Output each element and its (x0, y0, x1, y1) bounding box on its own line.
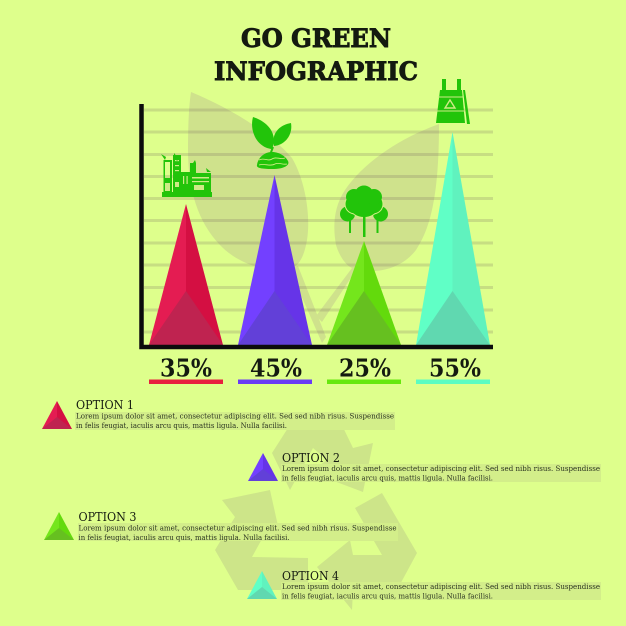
option 2: OPTION 2 (282, 450, 340, 465)
option 1: in felis feugiat, iaculis arcu quis, mattis ligula. Nulla facilisi. (76, 421, 287, 430)
background: leaves (188, 92, 439, 343)
option 4: OPTION 4 (282, 568, 339, 583)
title: GO GREEN (241, 24, 391, 53)
label: 25%: 25% (339, 354, 391, 382)
label: 55%: 55% (429, 354, 481, 382)
title: INFOGRAPHIC (214, 57, 418, 86)
option 4 (247, 568, 601, 600)
option 4: in felis feugiat, iaculis arcu quis, mattis ligula. Nulla facilisi. (282, 592, 493, 600)
percentage labels (149, 354, 490, 384)
option 1 (42, 397, 395, 430)
option 4: Lorem ipsum dolor sit amet, consectetur adipiscing elit. Sed sed nibh risus. Suspendisse (282, 582, 600, 591)
background: recycle symbol (215, 417, 417, 610)
title (214, 24, 418, 86)
icon: red triangle (42, 401, 72, 429)
grid lines (144, 108, 493, 334)
triangle chart (149, 132, 490, 345)
icon: factory (161, 153, 212, 197)
label: 35%: 35% (160, 354, 212, 382)
icon: trees (340, 186, 388, 237)
option 1: Lorem ipsum dolor sit amet, consectetur adipiscing elit. Sed sed nibh risus. Suspendisse (76, 412, 394, 420)
icon: teal triangle (247, 571, 277, 599)
option 3: OPTION 3 (78, 509, 137, 524)
option 2 (248, 450, 601, 482)
bar: purple 45% (238, 175, 312, 345)
option 3: in felis feugiat, iaculis arcu quis, mattis ligula. Nulla facilisi. (78, 533, 290, 542)
icon: sprout (252, 117, 291, 169)
icon: shopping bag (436, 79, 470, 124)
bar: teal 55% (416, 132, 490, 345)
bar: red 35% (149, 204, 223, 345)
icon: purple triangle (248, 453, 278, 481)
icon: green triangle (44, 512, 74, 540)
option 1: OPTION 1 (76, 397, 134, 412)
option 2: Lorem ipsum dolor sit amet, consectetur adipiscing elit. Sed sed nibh risus. Suspendisse (282, 464, 600, 473)
label: 45%: 45% (250, 354, 302, 382)
bar: green 25% (327, 241, 401, 345)
chart axes (142, 104, 493, 347)
option 3: Lorem ipsum dolor sit amet, consectetur adipiscing elit. Sed sed nibh risus. Suspendisse (78, 524, 396, 532)
option 3 (44, 509, 398, 542)
option 2: in felis feugiat, iaculis arcu quis, mattis ligula. Nulla facilisi. (282, 474, 493, 482)
